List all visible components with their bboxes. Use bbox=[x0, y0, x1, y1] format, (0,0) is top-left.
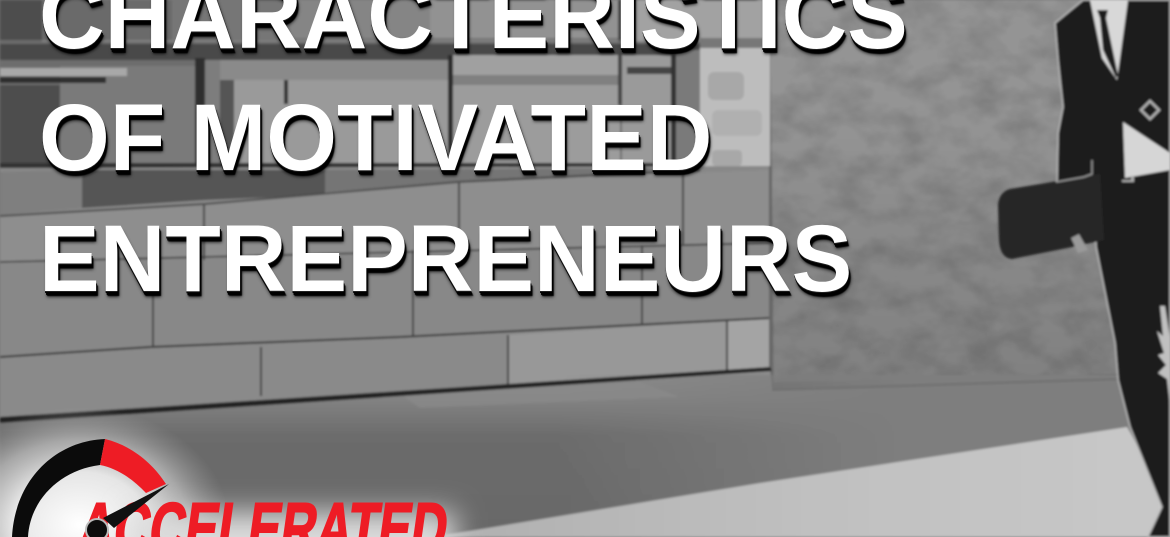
trouser highlights bbox=[1157, 306, 1170, 405]
concrete wall bbox=[769, 0, 1120, 389]
upper windows bbox=[0, 0, 770, 203]
light ground bbox=[445, 427, 1170, 537]
belt buckle bbox=[1122, 176, 1134, 182]
stone wall blocks bbox=[0, 166, 770, 418]
sleeve cuff bbox=[1056, 160, 1092, 182]
businessman silhouette bbox=[998, 0, 1170, 537]
title bbox=[39, 0, 908, 312]
guitar-shaped case bbox=[998, 174, 1104, 259]
shirt bbox=[1090, 0, 1128, 80]
gauge needle bbox=[103, 484, 169, 528]
gauge arc black bbox=[12, 439, 105, 537]
title: ENTREPRENEURS bbox=[39, 206, 852, 312]
jacket button diamond bbox=[1141, 101, 1159, 119]
gauge hub bbox=[86, 519, 108, 537]
logo glow bbox=[0, 407, 455, 537]
gauge arc red bbox=[100, 439, 166, 493]
title: OF MOTIVATED bbox=[39, 85, 712, 191]
hand bbox=[1071, 234, 1088, 253]
logo: Accelerated speedometer bbox=[12, 439, 453, 537]
tie bbox=[1097, 10, 1118, 78]
pavement bbox=[0, 367, 1170, 537]
